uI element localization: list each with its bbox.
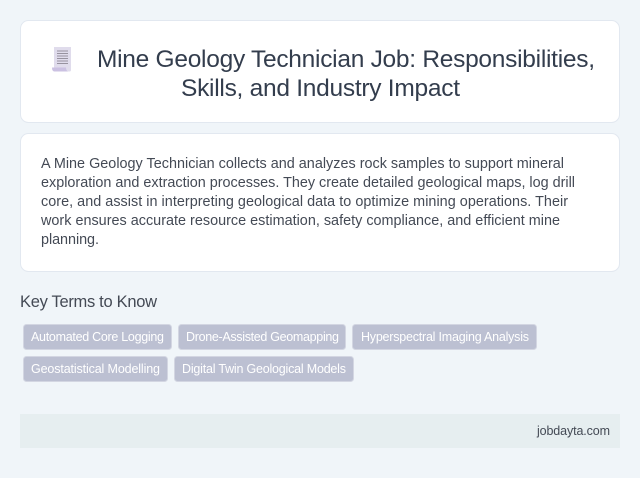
tag: automated core logging: Automated Core Logging bbox=[31, 330, 164, 344]
footer: jobdayta.com bbox=[536, 424, 610, 438]
icon: scroll bbox=[52, 47, 71, 72]
heading: Mine Geology Technician Job: Responsibilities, bbox=[97, 46, 595, 73]
panel: title bbox=[20, 20, 620, 122]
tags bbox=[24, 324, 536, 382]
tag: geostatistical modelling bbox=[24, 356, 168, 382]
description text bbox=[40, 156, 575, 248]
tag: digital twin geological models bbox=[174, 356, 354, 382]
footer bbox=[20, 414, 620, 448]
tag: hyperspectral imaging analysis: Hyperspectral Imaging Analysis bbox=[361, 330, 529, 344]
tag: digital twin geological models: Digital Twin Geological Models bbox=[182, 362, 346, 376]
heading: key terms: Key Terms to Know bbox=[20, 293, 157, 311]
heading bbox=[97, 46, 595, 102]
panel: description bbox=[20, 134, 620, 272]
tag: hyperspectral imaging analysis bbox=[352, 324, 536, 350]
description text: A Mine Geology Technician collects and analyzes rock samples to support mineral bbox=[41, 156, 564, 172]
tag: drone-assisted geomapping: Drone-Assisted Geomapping bbox=[186, 330, 339, 344]
heading: Skills, and Industry Impact bbox=[181, 75, 460, 102]
tag: geostatistical modelling: Geostatistical Modelling bbox=[31, 362, 160, 376]
description text: planning. bbox=[41, 232, 99, 248]
tag: drone-assisted geomapping bbox=[178, 324, 346, 350]
tag: automated core logging bbox=[24, 324, 172, 350]
description text: core, and assist in interpreting geological data to optimize mining operations. Their bbox=[41, 194, 568, 210]
description text: work ensures accurate resource estimation, safety compliance, and efficient mine bbox=[40, 213, 560, 229]
description text: exploration and extraction processes. They create detailed geological maps, log drill bbox=[41, 175, 575, 191]
